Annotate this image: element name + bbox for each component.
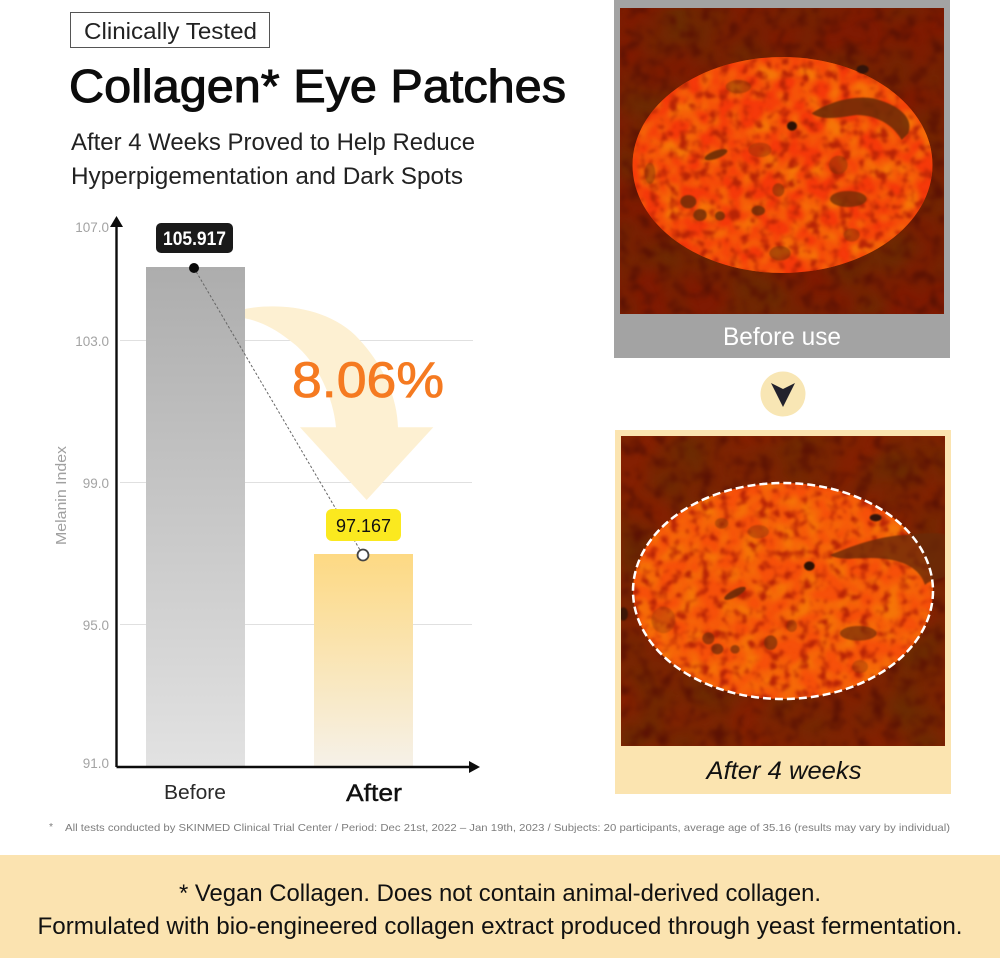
- arrow: curved reduction arrow: [245, 306, 433, 500]
- y axis title: Melanin Index: [54, 445, 70, 545]
- y axis tick labels: 107.0: [75, 220, 109, 235]
- value label: before: [156, 223, 233, 253]
- point: before: [189, 263, 199, 273]
- subtitle: Hyperpigementation and Dark Spots: [71, 163, 463, 190]
- footnote: *: [49, 822, 53, 833]
- banner: vegan collagen note: [0, 855, 1000, 958]
- badge: Clinically Tested: [70, 12, 270, 48]
- photo: before: [620, 8, 944, 314]
- title: Collagen* Eye Patches: [69, 60, 566, 112]
- dark spots: [619, 514, 945, 673]
- axes: [110, 216, 480, 773]
- subtitle: [71, 129, 475, 190]
- trend line: [194, 268, 363, 555]
- banner: vegan collagen note: * Vegan Collagen. Does not contain animal-derived collagen.: [179, 880, 821, 907]
- x label: after: After: [346, 780, 402, 807]
- dark spots: [645, 65, 910, 261]
- callout: 8.06%: 8.06%: [292, 352, 444, 408]
- bar: after: [314, 554, 413, 766]
- bar: before: [146, 267, 245, 766]
- value label: before: 105.917: [163, 229, 226, 250]
- badge: Clinically Tested: Clinically Tested: [84, 18, 257, 44]
- y axis tick labels: [75, 220, 109, 771]
- dashed outline: [633, 483, 933, 699]
- banner: vegan collagen note: Formulated with bio-engineered collagen extract produced through yeast fermentation.: [38, 913, 963, 940]
- footnote: All tests conducted by SKINMED Clinical Trial Center / Period: Dec 21st, 2022 – Jan 19th, 2023 / Subjects: 20 participants, average age of 35.16 (results may vary by individual): [65, 823, 950, 834]
- y axis tick labels: 91.0: [83, 756, 109, 771]
- y axis tick labels: 95.0: [83, 618, 109, 633]
- bar chart: melanin index: [54, 216, 480, 807]
- panel: after 4 weeks: [615, 430, 951, 794]
- caption: before use: Before use: [723, 323, 841, 351]
- x label: before: Before: [164, 782, 226, 804]
- y axis tick labels: 103.0: [75, 334, 109, 349]
- subtitle: After 4 Weeks Proved to Help Reduce: [71, 129, 475, 156]
- value label: after: [326, 509, 401, 541]
- value label: after: 97.167: [336, 516, 391, 536]
- point: after: [358, 550, 368, 560]
- icon: down arrow: [760, 372, 806, 416]
- photo: after: [619, 436, 945, 746]
- y axis tick labels: 99.0: [83, 476, 109, 491]
- panel: before use: [614, 0, 950, 358]
- caption: after 4 weeks: After 4 weeks: [704, 757, 862, 785]
